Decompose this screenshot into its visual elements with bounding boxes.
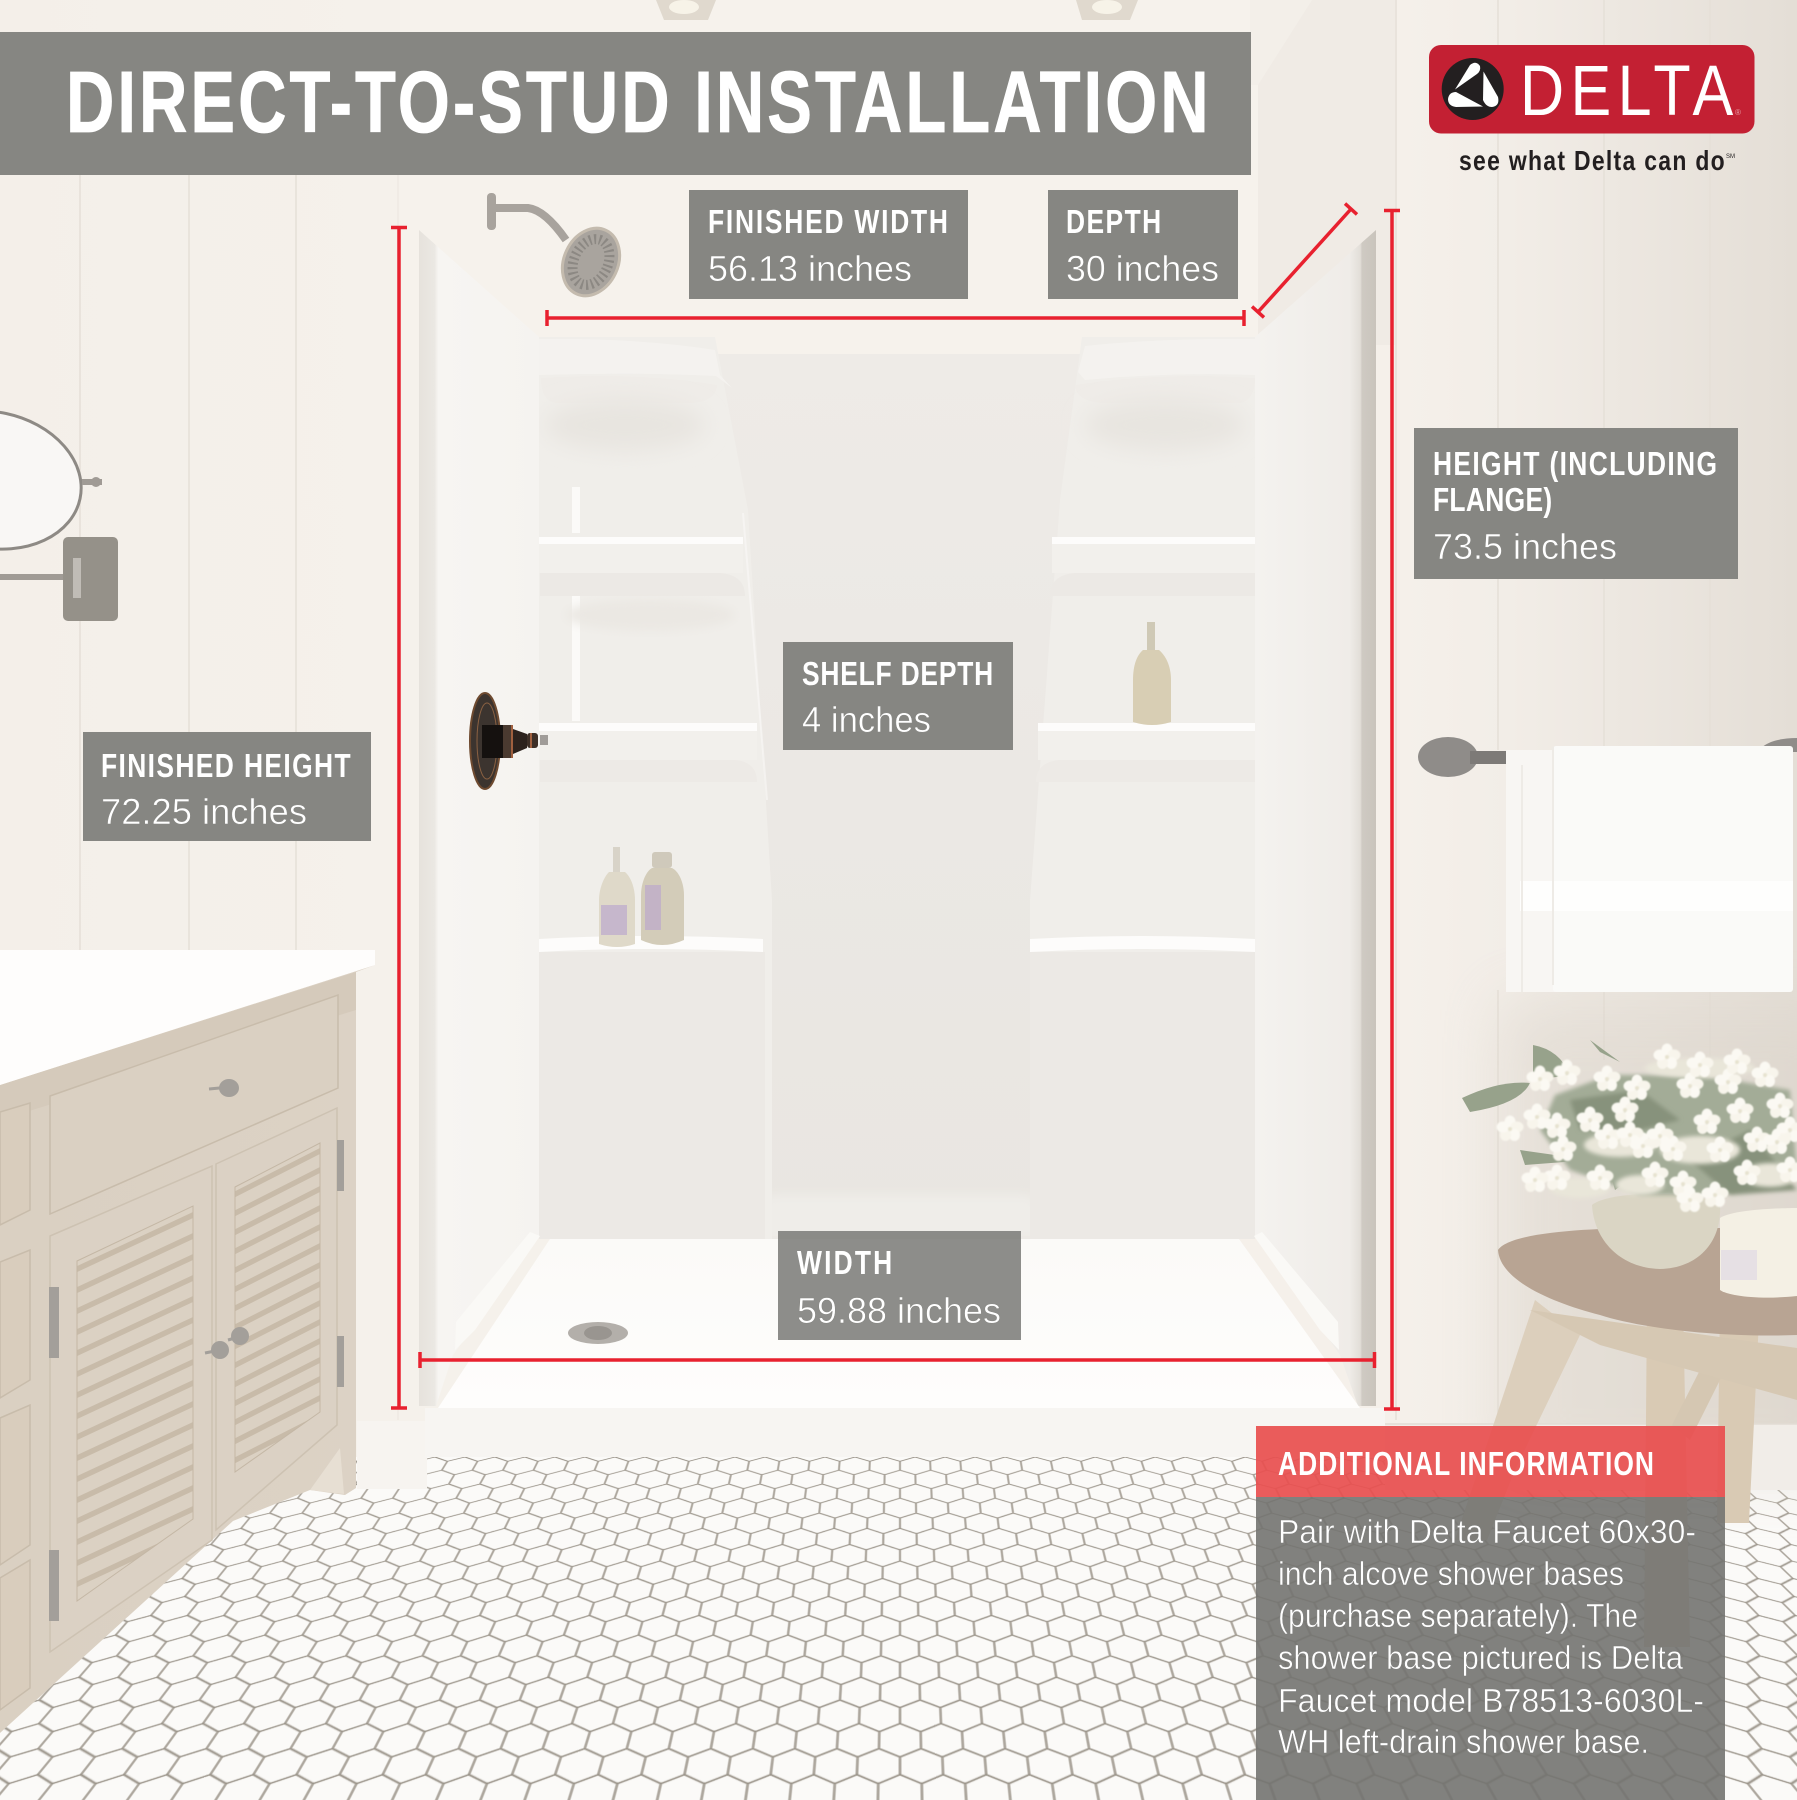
callout: shelf depth — [783, 642, 1013, 750]
left louvred door — [50, 1166, 212, 1652]
shower back wall — [539, 354, 1255, 1239]
dimension: width — [420, 1352, 1374, 1368]
hinges — [49, 1140, 344, 1621]
panel body: inch alcove shower bases — [1278, 1555, 1624, 1592]
tray side flanges — [455, 1232, 1339, 1350]
tagline: SM — [1726, 154, 1735, 160]
towel bar — [1418, 737, 1797, 777]
side panels — [0, 1103, 30, 1710]
logo mark — [1442, 58, 1504, 120]
title banner: DIRECT-TO-STUD INSTALLATION — [66, 55, 1209, 151]
dimension: depth — [1252, 204, 1357, 317]
callout: depth — [1048, 190, 1238, 299]
panel body: shower base pictured is Delta — [1278, 1639, 1684, 1676]
callout: width: 59.88 inches — [797, 1290, 1001, 1331]
callout: height including flange: FLANGE) — [1433, 482, 1552, 519]
panel: additional information — [1256, 1426, 1725, 1800]
foliage mass — [1540, 1075, 1797, 1195]
panel body: Pair with Delta Faucet 60x30- — [1278, 1513, 1696, 1550]
mirror with wall arm — [0, 395, 118, 621]
callout: finished height: FINISHED HEIGHT — [101, 748, 351, 785]
callout: width — [778, 1231, 1021, 1340]
central step at base of back wall — [738, 1195, 1062, 1239]
title banner — [0, 32, 1251, 175]
leaves — [1462, 1040, 1650, 1190]
callout: finished height — [83, 732, 371, 841]
dimension: finished width — [547, 310, 1244, 326]
dimension: finished height — [391, 228, 407, 1408]
callout: shelf depth: SHELF DEPTH — [802, 656, 993, 693]
right return panel — [1255, 230, 1376, 1406]
Delta logo: ® — [1735, 108, 1741, 117]
shower arm and head — [487, 193, 630, 305]
Delta logo: DELTA — [1520, 52, 1734, 131]
candle — [1720, 1208, 1797, 1298]
callout: finished width — [689, 190, 968, 299]
ceiling lights — [656, 0, 1138, 20]
shelf two — [539, 543, 743, 573]
vanity countertop — [0, 950, 375, 1085]
callout: height including flange: HEIGHT (INCLUDING — [1433, 446, 1717, 483]
flower bouquet — [1462, 1040, 1797, 1212]
callout: height including flange: 73.5 inches — [1433, 526, 1617, 567]
shower base apron — [425, 1408, 1385, 1457]
dimension: height including flange — [1384, 210, 1400, 1409]
panel body — [1256, 1497, 1725, 1800]
shelf three — [539, 731, 757, 760]
panel body: (purchase separately). The — [1278, 1597, 1638, 1634]
left shelf column — [539, 337, 772, 1239]
callout: height including flange — [1414, 428, 1738, 579]
callout: width: WIDTH — [797, 1245, 892, 1282]
faucet trim — [470, 693, 548, 789]
panel body: Faucet model B78513-6030L- — [1278, 1682, 1704, 1719]
panel body: WH left-drain shower base. — [1278, 1723, 1649, 1760]
left return panel — [419, 230, 539, 1406]
lower shelf body — [539, 952, 765, 1239]
callout: depth: 30 inches — [1066, 248, 1219, 289]
callout: finished height: 72.25 inches — [101, 791, 307, 832]
soap bottles left — [599, 847, 684, 947]
tagline: see what Delta can do — [1459, 146, 1725, 177]
right louvred door — [216, 1108, 337, 1530]
callout: shelf depth: 4 inches — [802, 699, 931, 740]
right shelf column — [1030, 337, 1255, 1239]
soap bottle right — [1133, 622, 1171, 725]
panel heading: ADDITIONAL INFORMATION — [1278, 1446, 1654, 1483]
baseboards — [357, 1421, 1797, 1490]
Delta logo — [1429, 45, 1754, 134]
knobs — [205, 1087, 242, 1353]
drain — [568, 1322, 628, 1344]
drawer — [50, 995, 338, 1214]
vase — [1592, 1194, 1720, 1269]
shower base tray — [438, 1239, 1360, 1408]
callout: depth: DEPTH — [1066, 204, 1161, 241]
towel — [1506, 746, 1793, 992]
shelf lips — [539, 537, 763, 952]
callout: finished width: FINISHED WIDTH — [708, 204, 948, 241]
panel heading — [1256, 1426, 1725, 1497]
blossoms — [1496, 1044, 1797, 1212]
side table — [1455, 1228, 1797, 1647]
callout: finished width: 56.13 inches — [708, 248, 912, 289]
vanity cabinet — [0, 965, 375, 1733]
pale blossom haze — [1550, 1058, 1797, 1198]
